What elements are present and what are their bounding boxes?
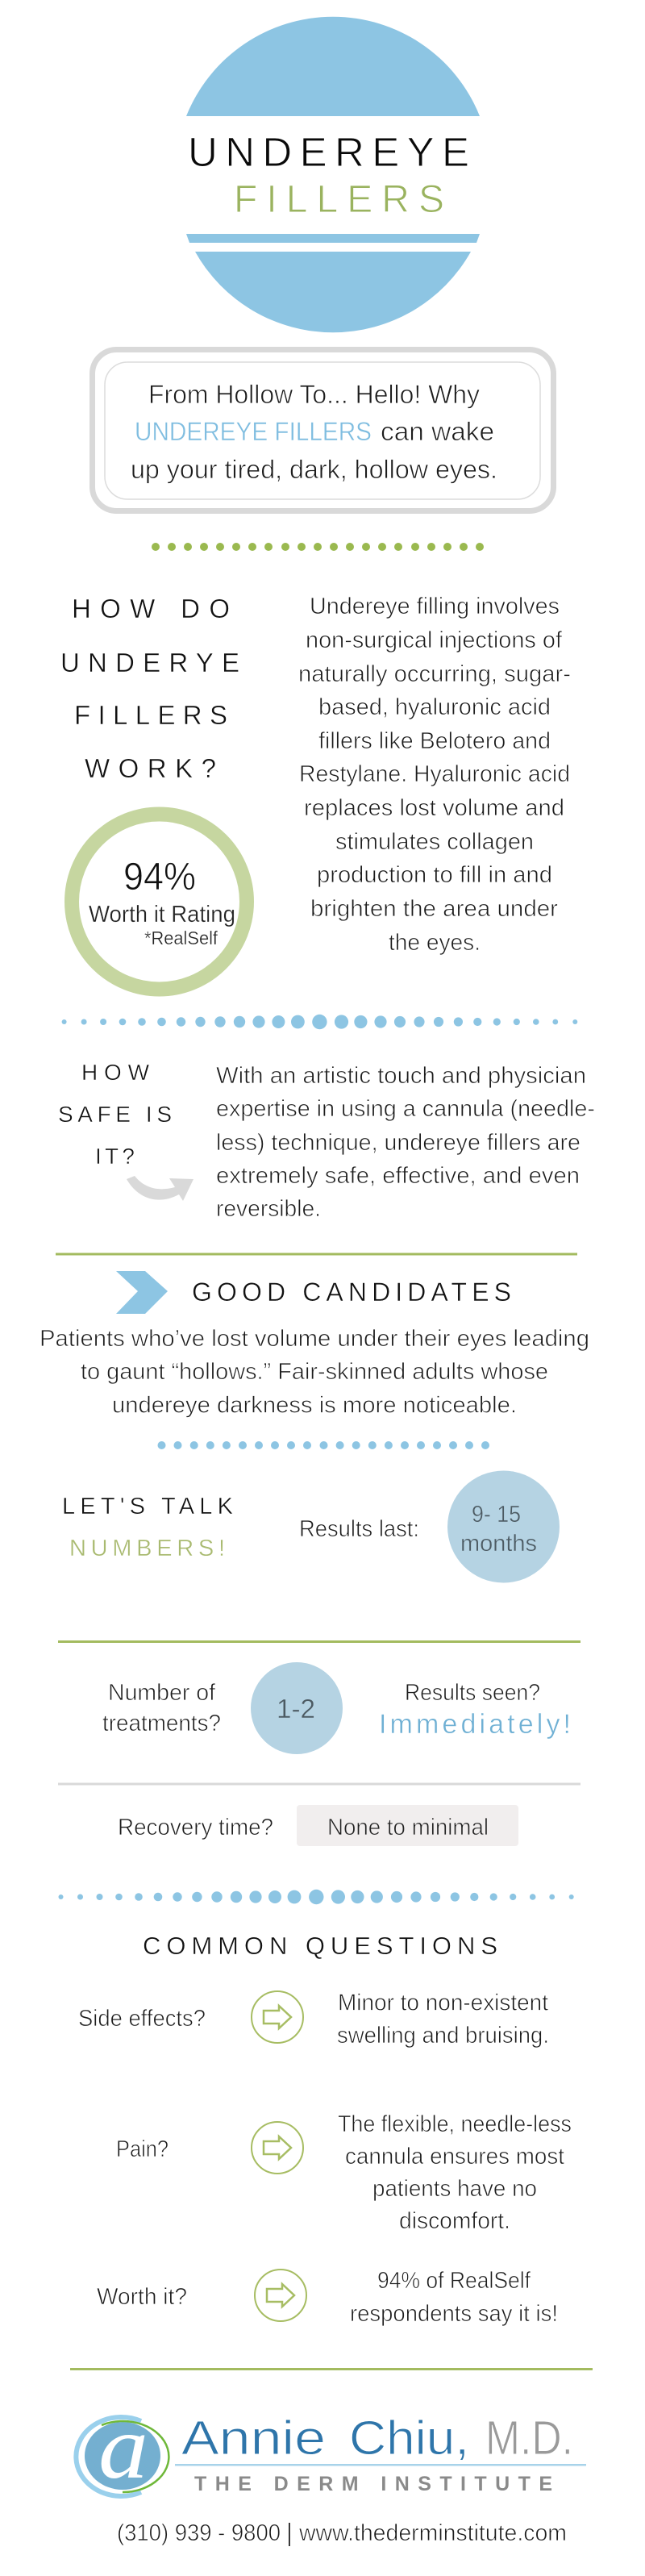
- heading: how do undereye fillers work: [60, 594, 239, 783]
- logo name: Annie: [181, 2411, 326, 2465]
- how safe text: [216, 1063, 595, 1222]
- answer: side effects: [337, 1990, 549, 2049]
- title badge: [186, 17, 480, 332]
- answer: worth it: respondents say it is!: [350, 2301, 558, 2327]
- intro text: From Hollow To... Hello! Why: [148, 380, 480, 409]
- question: pain: Pain?: [116, 2136, 169, 2162]
- heading: how do undereye fillers work: HOW DO: [72, 594, 230, 623]
- heading: how do undereye fillers work: WORK?: [85, 753, 216, 783]
- intro text: UNDEREYE FILLERS: [135, 417, 372, 446]
- green divider: [58, 1640, 580, 1643]
- how fillers work text: production to fill in and: [317, 862, 552, 888]
- circle: 9-15 months: [447, 1471, 560, 1582]
- icon: arrow in circle 1: [252, 1991, 303, 2043]
- good candidates text: Patients who’ve lost volume under their eyes leading: [40, 1326, 589, 1352]
- icon: blue chevron: [116, 1271, 168, 1314]
- heading: good candidates: GOOD CANDIDATES: [192, 1278, 511, 1307]
- question: worth it: Worth it?: [97, 2284, 187, 2310]
- results seen: Results seen?: [405, 1680, 540, 1706]
- results seen: [379, 1680, 571, 1740]
- logo: annie chiu: [76, 2398, 586, 2498]
- icon: arrow in circle 3: [255, 2270, 306, 2321]
- icon: curved gray arrow: [127, 1176, 194, 1201]
- rating ring: 94%: *RealSelf: [144, 927, 218, 948]
- how fillers work text: [298, 594, 571, 956]
- recovery time label: Recovery time?: [118, 1815, 273, 1840]
- how safe text: With an artistic touch and physician: [216, 1063, 586, 1089]
- answer: pain: [338, 2111, 572, 2234]
- how safe text: reversible.: [216, 1196, 321, 1222]
- intro callout box: [92, 350, 553, 511]
- intro text: [131, 380, 497, 484]
- intro text: up your tired, dark, hollow eyes.: [131, 455, 497, 484]
- green dotted divider: [152, 543, 484, 551]
- contact line: www.thederminstitute.com: [298, 2520, 567, 2546]
- answer: pain: discomfort.: [399, 2208, 510, 2234]
- logo rule: [175, 2464, 586, 2466]
- heading: how safe is it: SAFE IS: [58, 1102, 172, 1127]
- rating ring: 94%: 94%: [123, 856, 196, 898]
- intro text: can wake: [381, 417, 494, 446]
- icon: arrow in circle 2: [252, 2122, 303, 2174]
- title line: undereye: UNDEREYE: [188, 129, 469, 175]
- heading: how do undereye fillers work: FILLERS: [74, 700, 227, 730]
- how safe text: less) technique, undereye fillers are: [216, 1130, 580, 1156]
- answer: side effects: swelling and bruising.: [337, 2023, 549, 2049]
- how fillers work text: brighten the area under: [310, 896, 558, 922]
- heading: let's talk numbers: LET'S TALK: [62, 1494, 234, 1519]
- answer: side effects: Minor to non-existent: [338, 1990, 548, 2016]
- number of treatments label: [102, 1680, 221, 1736]
- how fillers work text: Restylane. Hyaluronic acid: [299, 761, 570, 787]
- heading: let's talk numbers: NUMBERS!: [69, 1536, 225, 1561]
- heading: how safe is it: [58, 1060, 172, 1169]
- how safe text: expertise in using a cannula (needle-: [216, 1096, 595, 1122]
- heading: how safe is it: HOW: [81, 1060, 150, 1085]
- heading: how safe is it: IT?: [95, 1144, 135, 1169]
- how fillers work text: replaces lost volume and: [304, 795, 564, 821]
- circle bottom segment: [195, 252, 471, 332]
- how fillers work text: fillers like Belotero and: [318, 728, 551, 754]
- good candidates text: undereye darkness is more noticeable.: [112, 1392, 517, 1418]
- circle: 1-2: [251, 1662, 343, 1754]
- circle: 1-2: 1-2: [277, 1694, 315, 1724]
- logo: annie chiu: M.D.: [485, 2411, 573, 2465]
- heading: common questions: COMMON QUESTIONS: [143, 1932, 497, 1960]
- blue dotted divider: [158, 1441, 489, 1449]
- circle thin band: [186, 234, 480, 243]
- recovery time pill: [297, 1805, 518, 1846]
- heading: how do undereye fillers work: UNDERYE: [60, 648, 239, 677]
- heading: let's talk numbers: [62, 1494, 234, 1561]
- logo emblem: [76, 2398, 169, 2498]
- good candidates text: [40, 1326, 589, 1418]
- circle top segment: [186, 17, 480, 116]
- logo: annie chiu: Chiu,: [349, 2411, 469, 2465]
- green divider: [56, 1253, 577, 1255]
- recovery time pill: None to minimal: [327, 1815, 489, 1840]
- how fillers work text: naturally occurring, sugar-: [298, 661, 571, 687]
- contact line: (310) 939 - 9800: [117, 2520, 281, 2546]
- how fillers work text: based, hyaluronic acid: [318, 694, 551, 720]
- answer: worth it: [350, 2268, 558, 2327]
- how safe text: extremely safe, effective, and even: [216, 1163, 580, 1189]
- answer: worth it: 94% of RealSelf: [377, 2268, 531, 2294]
- results seen: Immediately!: [379, 1709, 571, 1740]
- circle: 9-15 months: months: [460, 1531, 537, 1557]
- contact line: [117, 2520, 567, 2546]
- blue graduated dotted divider: [62, 1015, 577, 1029]
- number of treatments label: Number of: [108, 1680, 216, 1706]
- logo tagline: THE DERM INSTITUTE: [194, 2473, 552, 2495]
- answer: pain: The flexible, needle-less: [338, 2111, 572, 2137]
- good candidates text: to gaunt “hollows.” Fair-skinned adults whose: [81, 1359, 548, 1385]
- answer: pain: cannula ensures most: [345, 2144, 564, 2170]
- how fillers work text: the eyes.: [389, 930, 481, 956]
- results last label: Results last:: [299, 1516, 419, 1542]
- answer: pain: patients have no: [372, 2176, 537, 2202]
- title line: fillers: FILLERS: [234, 178, 444, 221]
- how fillers work text: stimulates collagen: [335, 829, 534, 855]
- rating ring: 94%: [72, 815, 247, 989]
- how fillers work text: non-surgical injections of: [306, 627, 563, 653]
- how fillers work text: Undereye filling involves: [310, 594, 560, 619]
- logo emblem: a: [98, 2398, 148, 2498]
- blue graduated dotted divider: [58, 1890, 574, 1904]
- number of treatments label: treatments?: [102, 1711, 221, 1736]
- gray divider: [58, 1782, 580, 1786]
- question: side effects: Side effects?: [78, 2006, 206, 2032]
- green divider: [70, 2368, 593, 2370]
- rating ring: 94%: Worth it Rating: [89, 902, 235, 927]
- circle: 9-15 months: 9- 15: [472, 1502, 521, 1528]
